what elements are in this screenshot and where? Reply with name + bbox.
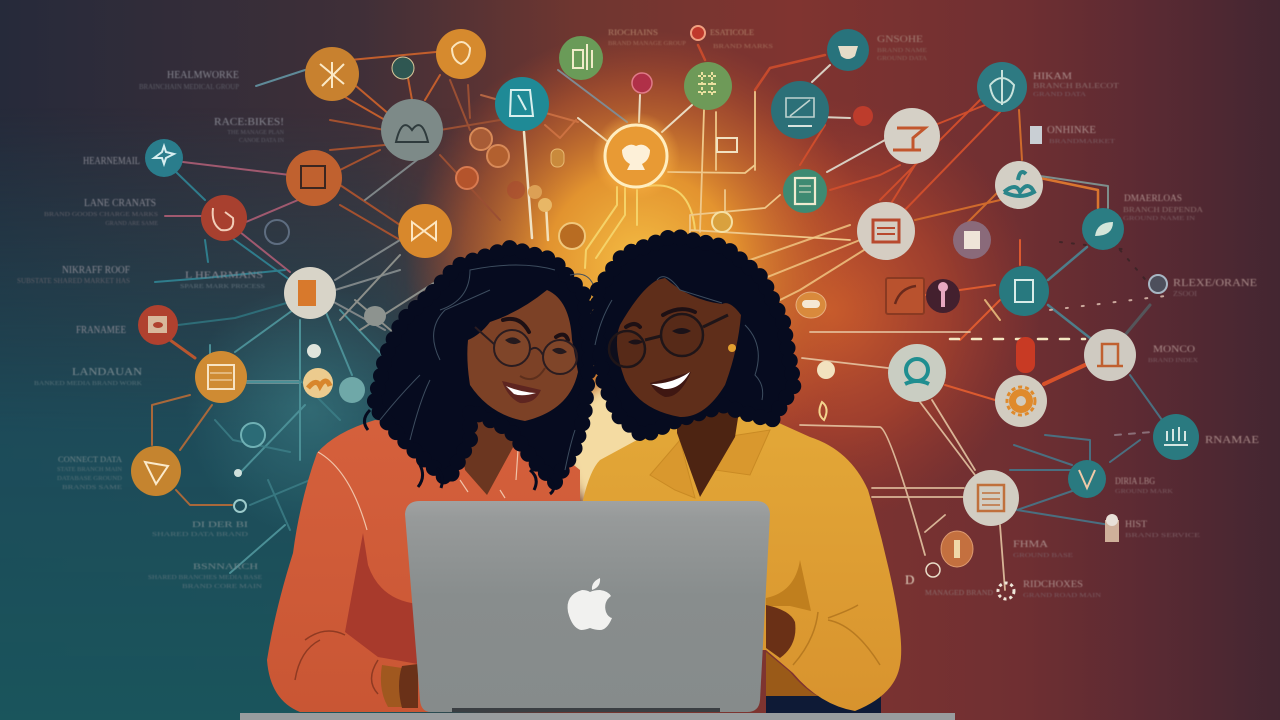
left woman hair strands <box>380 265 595 470</box>
node: green top <box>559 36 603 80</box>
gibberish node labels, left: THE MANAGE PLAN <box>227 130 285 136</box>
gibberish node labels, left: BRANDS SAME <box>62 485 122 491</box>
right woman collar <box>650 430 770 498</box>
left woman mouth <box>502 381 541 403</box>
left woman eyes <box>505 337 567 354</box>
node: gold lower left <box>195 351 247 403</box>
gibberish node labels, right: RIOCHAINS <box>608 28 658 37</box>
left woman sleeve creases <box>295 631 378 694</box>
gibberish node labels, left: BRAND GOODS CHARGE MARKS <box>44 211 158 218</box>
network connector lines <box>152 45 1176 590</box>
gibberish node labels, right: BRAND MANAGE GROUP <box>608 41 687 47</box>
gibberish node labels, right: GROUND NAME IN <box>1123 216 1196 222</box>
gibberish node labels, right: HIKAM <box>1033 71 1072 81</box>
node: light with teal swirl <box>995 161 1043 209</box>
gibberish node labels, right: D <box>905 572 914 587</box>
gibberish node labels, right: MANAGED BRAND <box>925 589 993 597</box>
gibberish node labels, right: GRAND DATA <box>1033 92 1087 98</box>
node: light doc <box>857 202 915 260</box>
node: red lower left <box>138 305 178 345</box>
gibberish node labels, left: SHARED DATA BRAND <box>152 532 249 538</box>
node: teal document <box>495 77 549 131</box>
right woman eyebrows <box>626 309 695 327</box>
gibberish node labels, left: STATE BRANCH MAIN <box>57 467 123 473</box>
node: gray <box>381 99 443 161</box>
node: orange left <box>286 150 342 206</box>
node: glowing centre <box>592 112 680 200</box>
gibberish node labels, right: DIRIA LBG <box>1115 476 1155 486</box>
gibberish node labels, left: SUBSTATE SHARED MARKET HAS <box>17 277 130 285</box>
gibberish node labels, right: RNAMAE <box>1205 435 1259 446</box>
gibberish node labels, left: DI DER BI <box>192 520 248 529</box>
right woman glasses <box>609 314 728 367</box>
gibberish node labels, left: FRANAMEE <box>76 325 126 336</box>
right woman hand <box>766 605 795 658</box>
gibberish node labels, right: GROUND MARK <box>1115 489 1174 495</box>
gibberish node labels, right: BRAND INDEX <box>1148 358 1199 364</box>
right woman hair strands <box>595 277 763 400</box>
gibberish node labels, right: RLEXE/ORANE <box>1173 278 1257 289</box>
person: right woman <box>583 236 901 713</box>
node: teal upper right <box>977 62 1027 112</box>
node: teal top right <box>827 29 869 71</box>
gibberish node labels, right: GNSOHE <box>877 34 924 44</box>
node: green doc <box>783 169 827 213</box>
right woman teeth <box>651 372 690 389</box>
node: gold bottom left <box>131 446 181 496</box>
gibberish node labels, left: SHARED BRANCHES MEDIA BASE <box>148 575 262 581</box>
node: mauve <box>953 221 991 259</box>
gibberish node labels, left: SPARE MARK PROCESS <box>180 284 265 290</box>
right woman earring <box>728 344 736 352</box>
left woman curls <box>364 410 554 494</box>
right woman trousers strip <box>766 696 881 713</box>
right woman side shading <box>766 560 811 611</box>
gibberish node labels, right: BRANDMARKET <box>1049 139 1115 145</box>
gibberish node labels, left: BRAINCHAIN MEDICAL GROUP <box>139 83 239 91</box>
gibberish node labels, right: MONCO <box>1153 344 1196 354</box>
gibberish node labels, right: ESATICOLE <box>710 28 754 37</box>
gibberish node labels, left: BSNNARCH <box>193 562 258 571</box>
gibberish node labels, right: HIST <box>1125 519 1148 529</box>
node: teal lower right <box>1068 460 1106 498</box>
gibberish node labels, left: HEARNEMAIL <box>83 156 140 167</box>
node: top left orange <box>305 47 359 101</box>
right woman face <box>617 278 741 417</box>
gibberish node labels, right: GROUND DATA <box>877 56 928 62</box>
node: light upper right <box>884 108 940 164</box>
gibberish node labels, right: BRANCH BALECOT <box>1033 82 1120 90</box>
left woman hand <box>399 664 418 708</box>
laptop lid <box>405 501 770 712</box>
node: teal left <box>145 139 183 177</box>
left woman orange blouse <box>267 420 580 712</box>
small ghost icons and dots <box>234 26 1167 599</box>
node: teal far right <box>1153 414 1199 460</box>
left woman blouse seams <box>318 450 518 530</box>
gibberish node labels, left: NIKRAFF ROOF <box>62 265 130 276</box>
right woman eyes <box>628 328 691 344</box>
node: light gear <box>995 375 1047 427</box>
left woman nose <box>520 368 545 379</box>
node: red left <box>201 195 247 241</box>
gibberish node labels, left: CONNECT DATA <box>58 455 122 464</box>
gibberish node labels, right: FHMA <box>1013 539 1049 549</box>
right woman hair mass <box>598 236 794 436</box>
gibberish node labels, left: DATABASE GROUND <box>57 476 123 482</box>
node: teal mid right <box>999 266 1049 316</box>
gibberish node labels, right: GRAND ROAD MAIN <box>1023 592 1101 599</box>
gibberish node labels, right: BRANCH DEPENDA <box>1123 206 1203 214</box>
node: top orange <box>436 29 486 79</box>
gibberish node labels, right: GROUND BASE <box>1013 553 1073 559</box>
gibberish node labels, left: LANDAUAN <box>72 367 142 378</box>
main network nodes <box>131 29 1199 526</box>
node: light lower right <box>963 470 1019 526</box>
left woman cuff <box>381 665 402 707</box>
right woman neck <box>677 405 740 497</box>
gibberish node labels, right: BRAND MARKS <box>713 44 773 50</box>
gibberish node labels, left <box>17 70 285 590</box>
left woman glasses <box>475 327 577 374</box>
gibberish node labels, right: ZSOOI <box>1173 290 1198 298</box>
left woman hair mass <box>374 248 590 482</box>
left woman neck <box>460 405 517 495</box>
node: teal chart <box>771 81 829 139</box>
laptop hinge <box>452 708 720 712</box>
right woman sleeve creases <box>793 605 880 665</box>
gibberish node labels, left: HEALMWORKE <box>167 70 239 81</box>
laptop <box>405 501 770 712</box>
left woman face <box>467 290 578 421</box>
left woman eyebrows <box>503 319 568 340</box>
left woman under-arm shading <box>345 533 418 664</box>
right woman mouth <box>650 372 691 397</box>
node: light left <box>284 267 336 319</box>
gibberish node labels, left: BANKED MEDIA BRAND WORK <box>34 380 142 387</box>
left woman teeth <box>506 386 536 395</box>
node: light far right <box>1084 329 1136 381</box>
gibberish node labels, right: ONHINKE <box>1047 125 1096 136</box>
icon: apple logo <box>568 578 612 630</box>
node: light teal knot <box>888 344 946 402</box>
desk strip <box>240 713 955 720</box>
gibberish node labels, left: CANOE DATA IN <box>239 138 285 144</box>
node: teal right <box>1082 208 1124 250</box>
right woman yellow shirt <box>583 410 901 711</box>
gibberish node labels, left: BRAND CORE MAIN <box>182 584 263 590</box>
gibberish node labels, left: GRAND ARE SAME <box>105 221 158 227</box>
gibberish node labels, right: RIDCHOXES <box>1023 579 1083 589</box>
gibberish node labels, left: RACE:BIKES! <box>214 117 284 128</box>
person: left woman <box>267 248 595 712</box>
node: green <box>684 62 732 110</box>
gibberish node labels, right <box>608 28 1259 599</box>
gibberish node labels, right: BRAND SERVICE <box>1125 533 1201 539</box>
gibberish node labels, left: L HEARMANS <box>185 270 263 280</box>
gibberish node labels, right: DMAERLOAS <box>1124 193 1182 203</box>
right woman lower shadow <box>766 652 818 696</box>
gibberish node labels, left: LANE CRANATS <box>84 198 156 209</box>
node: orange centre left <box>398 204 452 258</box>
gibberish node labels, right: BRAND NAME <box>877 48 927 54</box>
